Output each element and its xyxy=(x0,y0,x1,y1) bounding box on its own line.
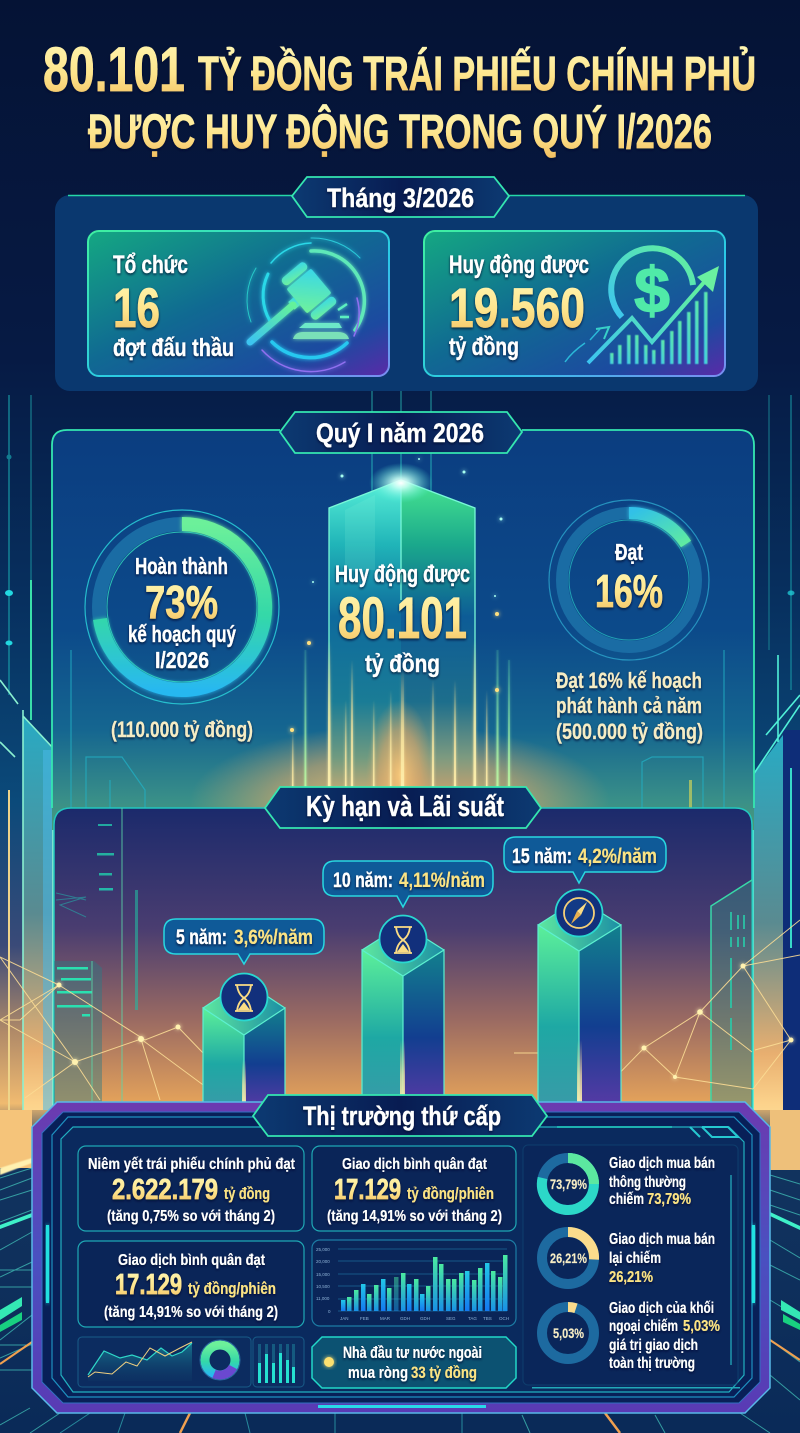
stat box: Giao dịch bình quân 1: 17.129 xyxy=(334,1174,401,1206)
ring: 16%: (500.000 tỷ đồng) xyxy=(556,719,703,744)
callout: 5 năm: 3,6%/năm xyxy=(234,926,313,949)
icon: compass 15 năm xyxy=(556,890,602,936)
donut: 73,79%: Giao dịch mua bán xyxy=(609,1155,715,1172)
donut: 5,03%: toàn thị trường xyxy=(609,1355,695,1372)
dim buildings xyxy=(71,650,724,808)
bar: 5 năm xyxy=(203,981,285,1110)
ring: 16% xyxy=(549,500,709,744)
tower: 80.101: 80.101 xyxy=(338,586,467,651)
donut: 73,79%: 73,79% xyxy=(550,1176,587,1192)
bar chart: SEG xyxy=(446,1316,456,1321)
card: Huy động được 19.560 tỷ đồng: Huy động được xyxy=(449,251,589,279)
card: Huy động được 19.560 tỷ đồng: tỷ đồng xyxy=(449,333,519,361)
building left xyxy=(0,680,53,1110)
icon: dollar and rising chart xyxy=(565,248,719,364)
bar chart: JAN xyxy=(340,1316,349,1321)
panel: donuts xyxy=(523,1145,740,1388)
bar chart: 10,500 xyxy=(316,1284,330,1289)
side light lines xyxy=(9,395,791,720)
mini line chart and donut xyxy=(78,1337,251,1387)
ring: 16%: Đạt 16% kế hoạch xyxy=(556,668,702,693)
panel: Kỳ hạn và Lãi suất xyxy=(0,787,800,1110)
donut: 26,21%: 26,21% xyxy=(550,1250,587,1266)
stat box: Giao dịch bình quân 2: Giao dịch bình quân đạt xyxy=(118,1252,266,1269)
stat box: Niêm yết: Niêm yết trái phiếu chính phủ đạt xyxy=(88,1156,296,1173)
bar chart xyxy=(312,1240,516,1326)
panel: Quý I năm 2026 xyxy=(52,391,754,875)
ring: 16%: Đạt xyxy=(615,539,643,565)
bar chart: 20,000 xyxy=(316,1259,330,1264)
icon: hourglass 5 năm xyxy=(220,974,268,1020)
stat box: Niêm yết: (tăng 0,75% so với tháng 2) xyxy=(107,1208,275,1225)
heading: Kỳ hạn và Lãi suất xyxy=(265,787,541,828)
callout: nhà đầu tư nước ngoài: 33 tỷ đồng xyxy=(411,1363,477,1382)
callout: 15 năm xyxy=(504,837,666,883)
donut: 73,79%: 73,79% xyxy=(647,1191,691,1208)
heading: Thị trường thứ cấp: Thị trường thứ cấp xyxy=(303,1101,501,1131)
bar chart: MAR xyxy=(380,1316,391,1321)
panel: Thị trường thứ cấp xyxy=(32,1095,770,1413)
stat box: Niêm yết xyxy=(78,1146,304,1231)
bar chart: OCH xyxy=(499,1316,509,1321)
ring: 73%: kế hoạch quý xyxy=(128,621,236,647)
floor grid left xyxy=(0,1168,60,1433)
donut: 26,21%: 26,21% xyxy=(609,1269,653,1286)
bar chart: TAG xyxy=(468,1316,477,1321)
tower: 80.101 xyxy=(190,391,610,875)
donut: 5,03%: 5,03% xyxy=(553,1325,584,1341)
network lines xyxy=(0,920,800,1100)
stat box: Giao dịch bình quân 1: tỷ đồng/phiên xyxy=(407,1184,494,1203)
card: Tổ chức 16 đợt đấu thầu: đợt đấu thầu xyxy=(113,334,234,362)
icon: dollar and rising chart: $ xyxy=(634,254,670,326)
building right xyxy=(753,655,800,1110)
callout: 10 năm: 4,11%/năm xyxy=(399,869,485,892)
donut: 73,79% xyxy=(542,1155,715,1210)
bar: 15 năm xyxy=(538,899,621,1110)
donut: 26,21%: lại chiếm xyxy=(609,1250,661,1267)
tower: 80.101: tỷ đồng xyxy=(365,650,440,678)
ring: 73%: I/2026 xyxy=(155,647,209,673)
callout: 15 năm: 4,2%/năm xyxy=(578,845,657,868)
ring: 16%: phát hành cả năm xyxy=(556,693,702,718)
donut: 73,79%: chiếm xyxy=(609,1191,644,1208)
callout: 5 năm: 5 năm: xyxy=(176,926,227,949)
title: 80.101 xyxy=(43,35,185,105)
stat box: Giao dịch bình quân 2 xyxy=(78,1241,304,1327)
bar chart: GDH xyxy=(400,1316,410,1321)
mini bars xyxy=(253,1337,304,1387)
stat box: Giao dịch bình quân 2: tỷ đồng/phiên xyxy=(188,1279,276,1298)
card: Tổ chức 16 đợt đấu thầu: 16 xyxy=(113,276,160,339)
stat box: Giao dịch bình quân 2: (tăng 14,91% so với tháng 2) xyxy=(104,1304,278,1321)
ring: 16%: 16% xyxy=(595,565,663,617)
card: Huy động được 19.560 tỷ đồng: 19.560 xyxy=(449,276,585,339)
bar chart: 25,000 xyxy=(316,1247,330,1252)
tower: 80.101: Huy động được xyxy=(335,561,470,588)
ring: 73%: 73% xyxy=(145,576,218,628)
donut: 5,03%: ngoại chiếm xyxy=(609,1318,678,1335)
heading: Thị trường thứ cấp xyxy=(253,1095,547,1136)
heading: Kỳ hạn và Lãi suất: Kỳ hạn và Lãi suất xyxy=(306,791,504,823)
bar chart: 0 xyxy=(328,1309,331,1314)
heading: Quý I năm 2026: Quý I năm 2026 xyxy=(316,418,484,448)
donut: 5,03%: Giao dịch của khối xyxy=(609,1300,714,1317)
card: Tổ chức 16 đợt đấu thầu: Tổ chức xyxy=(113,251,188,279)
heading: Tháng 3/2026 xyxy=(292,177,509,217)
card: Huy động được 19.560 tỷ đồng xyxy=(424,231,725,376)
stat box: Giao dịch bình quân 1 xyxy=(312,1146,516,1231)
stat box: Giao dịch bình quân 1: Giao dịch bình quân đạt xyxy=(342,1156,488,1173)
icon: hourglass 10 năm xyxy=(380,916,426,962)
ring: 73%: Hoàn thành xyxy=(135,553,228,579)
icon: gavel xyxy=(247,238,364,372)
stat box: Niêm yết: 2.622.179 xyxy=(112,1174,218,1206)
bar: 10 năm xyxy=(362,924,444,1110)
decorative skyline in panel xyxy=(54,808,752,1110)
bar chart: GDH xyxy=(420,1316,430,1321)
floor grid right xyxy=(522,1175,800,1433)
callout: 15 năm: 15 năm: xyxy=(512,845,572,868)
callout: 10 năm: 10 năm: xyxy=(333,869,393,892)
bar chart: FEB xyxy=(360,1316,369,1321)
callout: nhà đầu tư nước ngoài xyxy=(312,1337,516,1388)
bar chart: TBS xyxy=(483,1316,492,1321)
stat box: Giao dịch bình quân 1: (tăng 14,91% so với tháng 2) xyxy=(327,1208,502,1225)
donut: 5,03%: 5,03% xyxy=(683,1318,720,1335)
donut: 5,03%: giá trị giao dịch xyxy=(609,1337,698,1354)
donut: 26,21% xyxy=(542,1231,715,1286)
ring: 73% xyxy=(85,510,279,742)
stat box: Giao dịch bình quân 2: 17.129 xyxy=(115,1269,182,1301)
title xyxy=(43,35,756,159)
stat box: Niêm yết: tỷ đồng xyxy=(224,1184,270,1203)
heading: Tháng 3/2026: Tháng 3/2026 xyxy=(327,183,474,213)
callout: 10 năm xyxy=(323,861,493,907)
heading: Quý I năm 2026 xyxy=(280,412,522,453)
donut: 5,03% xyxy=(542,1300,720,1372)
donut: 73,79%: thông thường xyxy=(609,1174,686,1191)
callout: nhà đầu tư nước ngoài: Nhà đầu tư nước ngoài xyxy=(343,1343,482,1362)
bar chart: 11,000 xyxy=(316,1296,330,1301)
ring: 73%: (110.000 tỷ đồng) xyxy=(111,717,253,742)
callout: 5 năm xyxy=(164,919,324,964)
donut: 26,21%: Giao dịch mua bán xyxy=(609,1231,715,1248)
callout: nhà đầu tư nước ngoài: mua ròng xyxy=(348,1363,408,1382)
card: Tổ chức 16 đợt đấu thầu xyxy=(88,231,389,376)
bar chart: 15,000 xyxy=(316,1272,330,1277)
